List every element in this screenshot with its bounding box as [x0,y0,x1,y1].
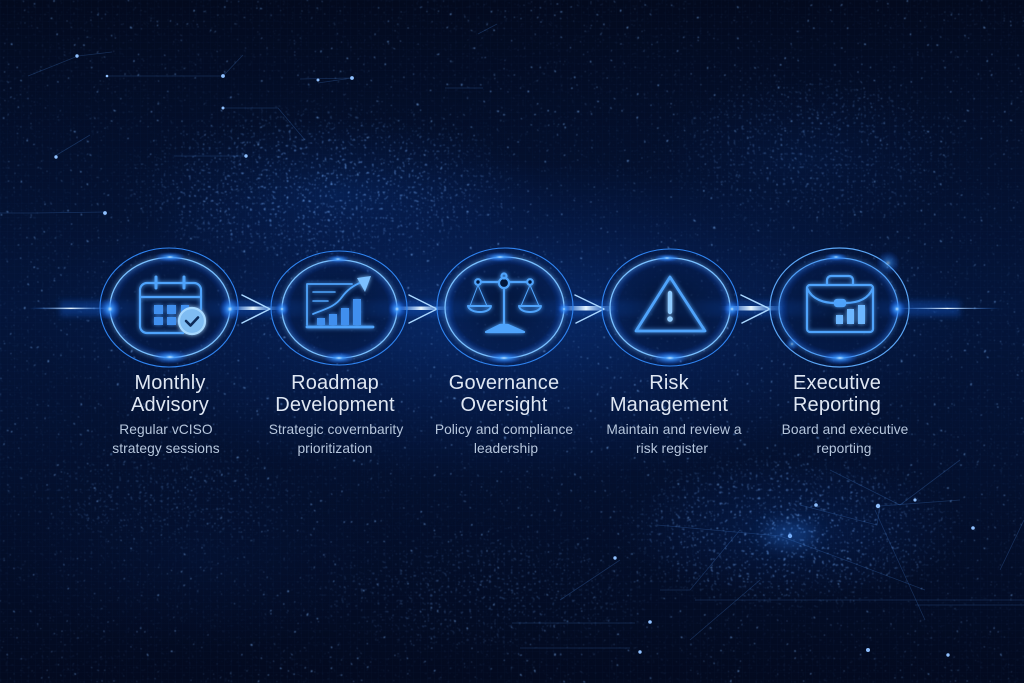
description: Monthly Advisory: strategy sessions [112,441,220,456]
heading: Monthly Advisory: Monthly [134,372,206,394]
icon: warning triangle [636,277,705,331]
step 4: Risk Management [602,249,742,456]
arrow: step 1 to 2 [242,295,270,323]
description: Roadmap Development: prioritization [297,441,373,456]
icon: balance scale [468,274,541,332]
ring: step 4 [602,249,740,366]
description: Roadmap Development: Strategic covernbarity [269,422,403,437]
step 3: Governance Oversight [435,248,573,456]
icon: calendar with check [140,277,205,334]
description: Executive Reporting: reporting [817,441,871,456]
description: Executive Reporting: Board and executive [782,422,908,437]
arrow: step 4 to 5 [741,295,770,323]
description: Risk Management: risk register [636,441,708,456]
step 5: Executive Reporting [770,248,909,456]
description: Governance Oversight: Policy and compliance [435,422,573,437]
heading: Roadmap Development: Development [275,394,395,416]
arrow: step 3 to 4 [575,295,604,323]
heading: Risk Management: Management [610,394,728,416]
ring: step 2 [271,251,407,365]
light beam connecting the steps [30,301,1000,316]
heading: Executive Reporting: Reporting [793,394,881,416]
step 2: Roadmap Development [269,251,407,456]
icon: briefcase with bars [807,276,873,332]
ring: step 5 [770,248,909,367]
description: Governance Oversight: leadership [474,441,538,456]
heading: Executive Reporting: Executive [793,372,881,394]
ring: step 3 [437,248,573,366]
heading: Governance Oversight: Governance [449,372,559,394]
heading: Risk Management: Risk [649,372,689,394]
heading: Roadmap Development: Roadmap [291,372,379,394]
heading: Governance Oversight: Oversight [461,394,548,416]
description: Monthly Advisory: Regular vCISO [119,422,213,437]
step 1: Monthly Advisory [99,248,241,456]
icon: growth chart [307,276,373,327]
ring: step 1 [99,248,241,367]
heading: Monthly Advisory: Advisory [131,394,209,416]
description: Risk Management: Maintain and review a [606,422,742,437]
arrow: step 2 to 3 [409,295,437,323]
